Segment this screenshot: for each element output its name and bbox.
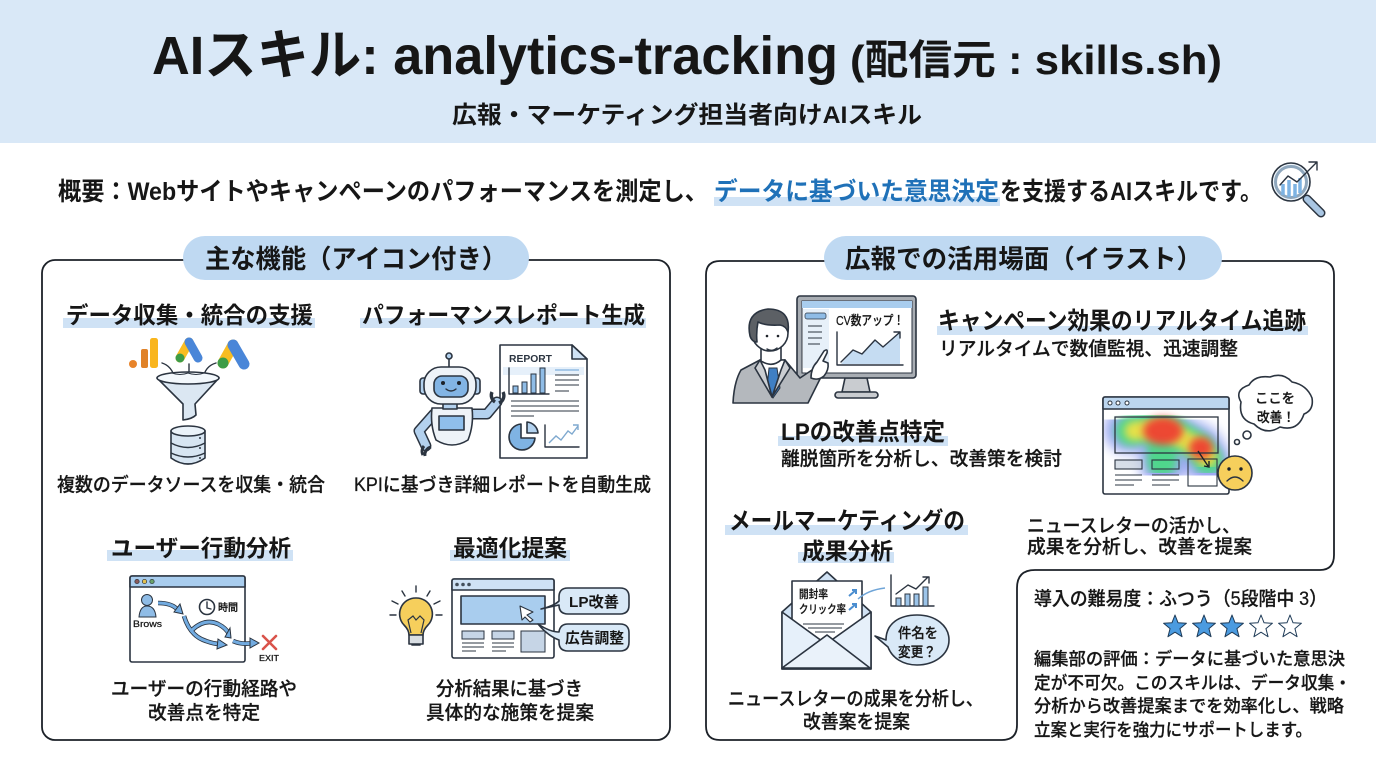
overview sentence	[58, 177, 1262, 206]
callout: ad adjustment	[538, 624, 629, 651]
description: email marketing: 改善案を提案	[803, 711, 910, 733]
illustration: envelope with metrics: 開封率	[799, 587, 828, 601]
robot	[419, 353, 504, 456]
use case heading: email marketing: 成果分析	[802, 538, 893, 564]
report sheet: REPORT	[509, 353, 553, 365]
icon: browser path to exit	[130, 576, 279, 663]
editor review text: 定が不可欠。このスキルは、データ収集・	[1034, 673, 1351, 693]
editor review text: 編集部の評価：データに基づいた意思決	[1034, 649, 1345, 669]
heading: data collection: データ収集・統合の支援	[66, 302, 313, 328]
illustration: envelope with metrics: クリック率	[799, 603, 846, 616]
feature: performance report	[354, 302, 651, 496]
heading pill: main features: 主な機能（アイコン付き）	[205, 244, 507, 274]
title: (配信元 : skills.sh)	[850, 37, 1222, 83]
description: newsletter use: 成果を分析し、改善を提案	[1027, 536, 1252, 558]
overview sentence: を支援するAIスキルです。	[1000, 178, 1262, 206]
illustration: heatmap page	[1103, 375, 1312, 494]
description: optimization	[426, 678, 594, 724]
description: user behavior: ユーザーの行動経路や	[111, 678, 297, 700]
heading pill: use cases: 広報での活用場面（イラスト）	[845, 244, 1202, 274]
callout: LP improvement: LP改善	[569, 593, 619, 611]
thought bubble: 改善！	[1257, 409, 1295, 425]
icon: browser path to exit: EXIT	[259, 654, 279, 663]
description: data collection: 複数のデータソースを収集・統合	[57, 473, 325, 496]
title: AIスキル: analytics-tracking	[152, 26, 838, 86]
heading pill: main features	[183, 236, 529, 280]
panel: use cases in PR	[706, 236, 1334, 740]
use case heading: email marketing	[725, 507, 968, 564]
header band	[0, 0, 1376, 143]
speech bubble: 件名を	[898, 625, 938, 641]
use case: campaign tracking: リアルタイムで数値監視、迅速調整	[939, 338, 1238, 360]
description: email marketing: ニュースレターの成果を分析し、	[728, 688, 983, 710]
description: email marketing	[728, 688, 983, 733]
heatmap blobs	[1127, 417, 1213, 465]
use case heading: email marketing: メールマーケティングの	[729, 507, 965, 535]
monitor: CV数アップ！	[836, 313, 904, 328]
description: user behavior	[111, 678, 297, 724]
illustration: presenter and monitor	[733, 296, 916, 403]
use case: campaign tracking: キャンペーン効果のリアルタイム追跡	[938, 308, 1306, 335]
icon: browser path to exit: 時間	[218, 601, 238, 614]
use case: LP improvement: LPの改善点特定	[781, 419, 945, 446]
panel: main features	[42, 236, 670, 740]
thought bubble: ここを	[1255, 391, 1295, 406]
icon: landing page with callouts	[452, 579, 629, 658]
report sheet	[500, 345, 587, 458]
feature: user behavior	[107, 535, 297, 724]
title	[152, 26, 1222, 86]
heading: performance report: パフォーマンスレポート生成	[362, 302, 645, 328]
monitor	[797, 296, 916, 398]
description: user behavior: 改善点を特定	[148, 702, 260, 724]
heading: optimization: 最適化提案	[453, 535, 567, 561]
thought bubble	[1234, 375, 1312, 444]
feature: data collection	[57, 302, 325, 496]
description: optimization: 具体的な施策を提案	[426, 702, 594, 724]
description: performance report: KPIに基づき詳細レポートを自動生成	[354, 474, 651, 496]
icon: magnifier with chart	[1272, 162, 1321, 213]
heading pill: use cases	[824, 236, 1222, 280]
sad face	[1218, 456, 1252, 490]
icon: browser path to exit: Brows	[133, 619, 162, 630]
speech bubble: 変更？	[898, 644, 936, 660]
star rating: 3 of 5	[1164, 615, 1301, 637]
icon: light bulb	[390, 586, 442, 645]
overview sentence: データに基づいた意思決定	[714, 177, 999, 206]
mini bar chart	[891, 575, 934, 606]
icon: data sources into funnel and database	[129, 338, 244, 464]
speech bubble	[875, 615, 949, 665]
description: newsletter use	[1027, 515, 1252, 558]
feature: optimization	[390, 535, 629, 724]
icon: robot with report	[419, 345, 587, 458]
callout: LP improvement	[541, 588, 629, 614]
editor review text: 立案と実行を強力にサポートします。	[1034, 720, 1312, 740]
editor review text	[1034, 649, 1351, 740]
editor review text: 分析から改善提案までを効率化し、戦略	[1034, 696, 1344, 716]
overview sentence: 概要：Webサイトやキャンペーンのパフォーマンスを測定し、	[58, 178, 708, 206]
callout: ad adjustment: 広告調整	[565, 629, 624, 647]
description: optimization: 分析結果に基づき	[436, 678, 583, 700]
description: newsletter use: ニュースレターの活かし、	[1027, 515, 1240, 537]
subtitle: 広報・マーケティング担当者向けAIスキル	[452, 101, 922, 129]
presenter	[733, 309, 828, 403]
difficulty rating: 導入の難易度：ふつう（5段階中 3）	[1034, 588, 1327, 610]
use case: LP improvement: 離脱箇所を分析し、改善策を検討	[781, 448, 1062, 470]
use case: LP improvement	[778, 419, 1062, 470]
illustration: envelope with metrics	[782, 572, 949, 669]
difficulty and editor review box	[1034, 588, 1351, 740]
heading: user behavior: ユーザー行動分析	[111, 535, 291, 561]
use case: campaign tracking	[937, 308, 1308, 360]
